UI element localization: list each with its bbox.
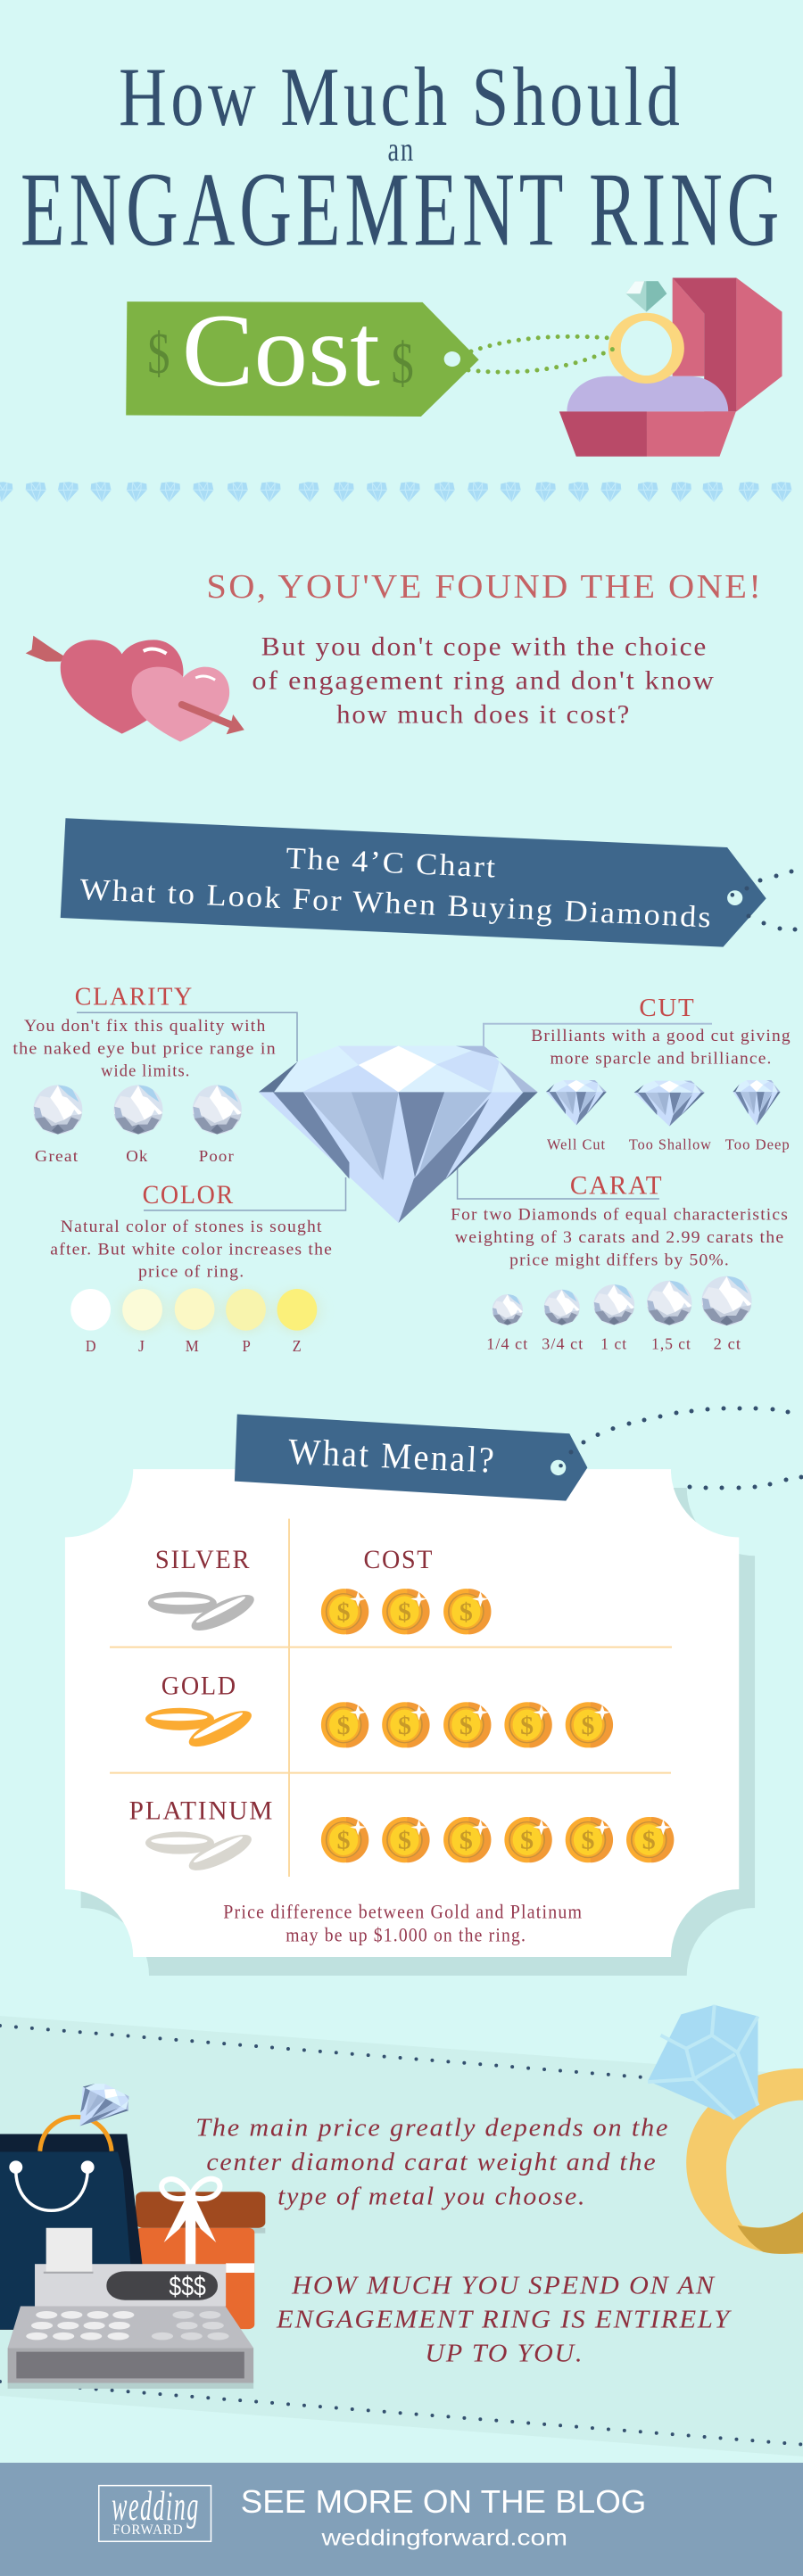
panel: color <box>50 1180 333 1355</box>
carat labels <box>486 1335 741 1353</box>
platinum row: $ <box>398 1827 411 1854</box>
closing text: main price: center diamond carat weight and the <box>206 2148 657 2176</box>
carat labels: 1,5 ct <box>651 1335 691 1353</box>
clarity labels: Poor <box>199 1147 235 1165</box>
color text: price of ring. <box>138 1262 244 1281</box>
platinum row: $ <box>642 1827 656 1854</box>
shopping bag <box>0 2077 143 2330</box>
banner: what menal: What Menal? <box>287 1431 497 1481</box>
color heading: COLOR <box>143 1180 235 1209</box>
color labels: P <box>243 1337 252 1355</box>
silver row: $ <box>398 1598 411 1627</box>
cut labels <box>547 1136 791 1153</box>
silver row: SILVER <box>155 1546 251 1574</box>
closing text: how much you spend <box>276 2271 733 2367</box>
gold row: $ <box>520 1712 534 1740</box>
intro text <box>252 632 716 729</box>
carat labels: 3/4 ct <box>542 1335 584 1353</box>
cut heading: CUT <box>639 994 695 1021</box>
icon: green price tag with Cost: Cost <box>182 293 380 408</box>
platinum row: $ <box>520 1827 534 1854</box>
price difference note: Price difference between Gold and Platinum <box>223 1901 583 1923</box>
closing text: main price: type of metal you choose. <box>277 2182 586 2210</box>
gold row <box>145 1672 613 1753</box>
color labels: D <box>86 1337 96 1355</box>
silver row <box>148 1546 491 1637</box>
closing text: main price: The main price greatly depends on the <box>195 2113 669 2142</box>
footer call to action <box>241 2484 646 2550</box>
color text <box>50 1217 333 1281</box>
icon: ring in open box <box>468 278 782 457</box>
icon: shopping bag, gift and cash register <box>0 2077 265 2389</box>
cash register <box>8 2228 253 2389</box>
cash register: $$$ <box>169 2271 206 2301</box>
silver row: $ <box>337 1598 351 1627</box>
color labels: J <box>138 1337 145 1355</box>
clarity gems <box>33 1085 242 1135</box>
panel: closing band <box>0 2016 803 2456</box>
icon: green price tag with Cost: $ <box>392 332 414 396</box>
footer call to action: SEE MORE ON THE BLOG <box>241 2484 646 2521</box>
platinum row: $ <box>337 1827 351 1854</box>
icon: green price tag with Cost: $ <box>147 322 170 386</box>
color text: Natural color of stones is sought <box>61 1217 323 1235</box>
clarity labels: Great <box>35 1147 79 1165</box>
gold row: $ <box>398 1712 411 1740</box>
panel: cut <box>531 994 791 1153</box>
color swatches <box>70 1288 319 1333</box>
diamond row divider <box>0 482 791 502</box>
panel: metal table card <box>65 1469 755 1976</box>
clarity text <box>12 1016 277 1080</box>
title: an <box>388 130 415 169</box>
panel: clarity <box>12 983 277 1165</box>
clarity text: the naked eye but price range in <box>12 1038 277 1058</box>
footer call to action: weddingforward.com <box>320 2526 567 2550</box>
platinum row <box>129 1796 674 1877</box>
carat text <box>451 1205 789 1269</box>
gold row: GOLD <box>161 1672 237 1700</box>
gift box <box>136 2179 265 2329</box>
title <box>21 50 783 268</box>
banner: the 4C chart <box>61 818 798 947</box>
logo: wedding forward <box>99 2483 211 2541</box>
dotted string from tag to ring <box>468 336 619 372</box>
carat labels: 1/4 ct <box>486 1335 528 1353</box>
cut labels: Too Shallow <box>629 1136 712 1153</box>
clarity text: You don't fix this quality with <box>24 1016 266 1035</box>
color text: after. But white color increases the <box>50 1239 333 1259</box>
logo: wedding forward: FORWARD <box>112 2522 183 2538</box>
carat heading: CARAT <box>570 1170 663 1200</box>
footer: wedding <box>112 2483 200 2530</box>
clarity heading: CLARITY <box>75 983 194 1011</box>
banner: the 4C chart: The 4’C Chart <box>286 842 498 885</box>
platinum row: $ <box>459 1827 473 1854</box>
color labels <box>86 1337 302 1355</box>
closing text: how much you spend: UP TO YOU. <box>425 2339 584 2367</box>
silver row: $ <box>459 1598 473 1627</box>
carat labels: 2 ct <box>714 1335 741 1353</box>
banner: the 4C chart: What to Look For When Buying Diamonds <box>79 873 714 935</box>
price difference note <box>223 1901 583 1946</box>
platinum row: PLATINUM <box>129 1796 274 1825</box>
cut diamonds <box>546 1080 781 1127</box>
icon: large diamond <box>259 1046 538 1223</box>
closing text: main price <box>195 2113 669 2210</box>
footer <box>0 2463 803 2576</box>
clarity labels <box>35 1147 235 1165</box>
carat gems <box>493 1276 752 1325</box>
gold row: $ <box>581 1712 594 1740</box>
panel: carat <box>451 1170 789 1353</box>
clarity labels: Ok <box>126 1147 148 1165</box>
color labels: M <box>186 1337 200 1355</box>
carat labels: 1 ct <box>600 1335 627 1353</box>
banner: what menal <box>235 1406 803 1501</box>
clarity text: wide limits. <box>101 1061 191 1080</box>
platinum row: $ <box>581 1827 594 1854</box>
price difference note: may be up $1.000 on the ring. <box>286 1924 526 1946</box>
cut text <box>531 1026 791 1068</box>
gold row: $ <box>459 1712 473 1740</box>
cut labels: Well Cut <box>547 1136 606 1153</box>
silver row: COST <box>364 1546 434 1574</box>
color labels: Z <box>293 1337 302 1355</box>
icon: hearts with arrow <box>26 636 244 742</box>
gold row: $ <box>337 1712 351 1740</box>
icon: big ring with blue gem <box>648 2005 803 2254</box>
